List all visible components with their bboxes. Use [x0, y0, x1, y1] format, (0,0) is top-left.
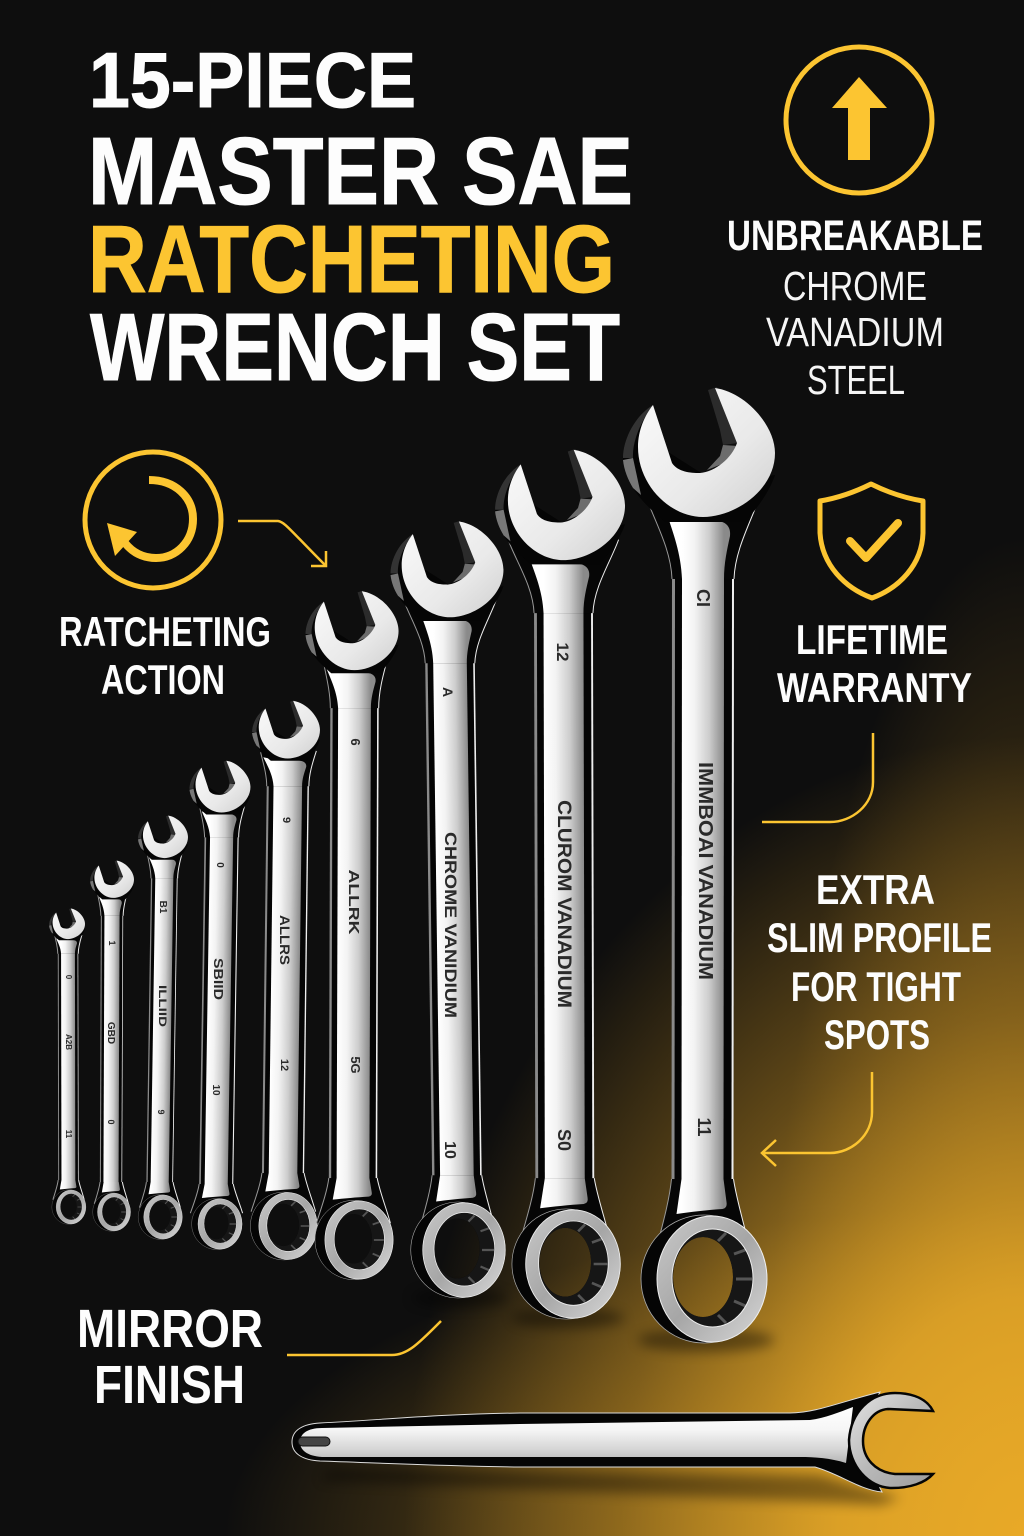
- callout: ratcheting action: RATCHETING: [59, 608, 271, 655]
- wrench 3: ILLIID: [156, 985, 168, 1027]
- icon: shield with check: [820, 484, 923, 598]
- callout: extra slim profile: EXTRA: [816, 866, 935, 913]
- wrench 4: [190, 760, 250, 1250]
- bottom horizontal wrench: [292, 1392, 933, 1492]
- wrench shadows: [320, 1289, 900, 1505]
- wrench 5: ALLRS: [277, 915, 293, 965]
- wrench 9: 11: [694, 1117, 714, 1137]
- leader line: warranty: [762, 733, 873, 822]
- callout: mirror finish: [77, 1299, 263, 1415]
- callout: lifetime warranty: WARRANTY: [777, 664, 972, 711]
- wrench 2: 0: [106, 1119, 116, 1125]
- title: [88, 36, 633, 401]
- wrench 4: 10: [210, 1084, 221, 1096]
- wrench 7: CHROME VANIDIUM: [441, 832, 460, 1018]
- wrench 6: 5G: [348, 1056, 363, 1074]
- wrench 8: CLUROM VANADIUM: [553, 800, 574, 1008]
- wrench 2: GBD: [105, 1022, 116, 1044]
- wrench 3: [138, 815, 188, 1239]
- title: RATCHETING: [88, 206, 615, 313]
- callout: extra slim profile: SPOTS: [824, 1011, 930, 1058]
- wrench 1: 0: [64, 975, 73, 980]
- callout: lifetime warranty: [777, 616, 972, 711]
- title: 15-PIECE: [89, 36, 416, 124]
- callout: ratcheting action: ACTION: [101, 656, 225, 703]
- wrench 9: CI: [693, 589, 713, 607]
- arrow: ratcheting to wrench: [238, 521, 326, 566]
- wrench 8: [495, 449, 625, 1319]
- wrench 1: [49, 908, 86, 1224]
- callout: unbreakable chrome vanadium steel: CHROME: [783, 263, 927, 309]
- wrench 9: IMMBOAI VANADIUM: [694, 762, 716, 980]
- wrench 4: SBIID: [211, 958, 226, 1000]
- wrench 5: 12: [278, 1059, 290, 1071]
- wrench 4: 0: [214, 862, 225, 868]
- wrench 3: 9: [156, 1109, 166, 1115]
- wrench 2: [90, 860, 134, 1231]
- wrench 3: B1: [157, 901, 168, 914]
- callout: extra slim profile: FOR TIGHT: [791, 963, 961, 1010]
- icon: up arrow in circle: [786, 47, 932, 193]
- callout: extra slim profile: [767, 866, 992, 1058]
- wrench 2: 1: [107, 940, 117, 946]
- callout: unbreakable chrome vanadium steel: STEEL: [807, 357, 905, 403]
- wrench 8: 12: [553, 643, 572, 661]
- callout: lifetime warranty: LIFETIME: [796, 616, 948, 663]
- arrow: slim profile: [762, 1072, 872, 1166]
- wrench 7: 10: [441, 1141, 458, 1159]
- icon: ratcheting circular arrow: [85, 452, 221, 588]
- wrench 6: [306, 591, 399, 1280]
- wrench 7: A: [440, 687, 456, 697]
- wrench 7: [391, 521, 505, 1298]
- wrench 9: [623, 387, 775, 1343]
- wrench 1: A2B: [64, 1034, 73, 1050]
- title: WRENCH SET: [90, 294, 620, 401]
- leader line: mirror finish: [287, 1321, 441, 1355]
- callout: unbreakable chrome vanadium steel: [727, 212, 983, 403]
- callout: ratcheting action: [59, 608, 271, 703]
- callout: mirror finish: MIRROR: [77, 1299, 263, 1359]
- wrench 6: 6: [348, 738, 363, 746]
- callout: unbreakable chrome vanadium steel: VANADIUM: [766, 309, 944, 355]
- wrench 1: 11: [64, 1130, 73, 1139]
- title: MASTER SAE: [88, 118, 633, 225]
- wrench 5: [250, 700, 320, 1260]
- wrench 6: ALLRK: [345, 870, 362, 935]
- wrench 8: S0: [554, 1129, 574, 1151]
- callout: mirror finish: FINISH: [94, 1355, 245, 1415]
- wrench 5: 9: [280, 817, 292, 823]
